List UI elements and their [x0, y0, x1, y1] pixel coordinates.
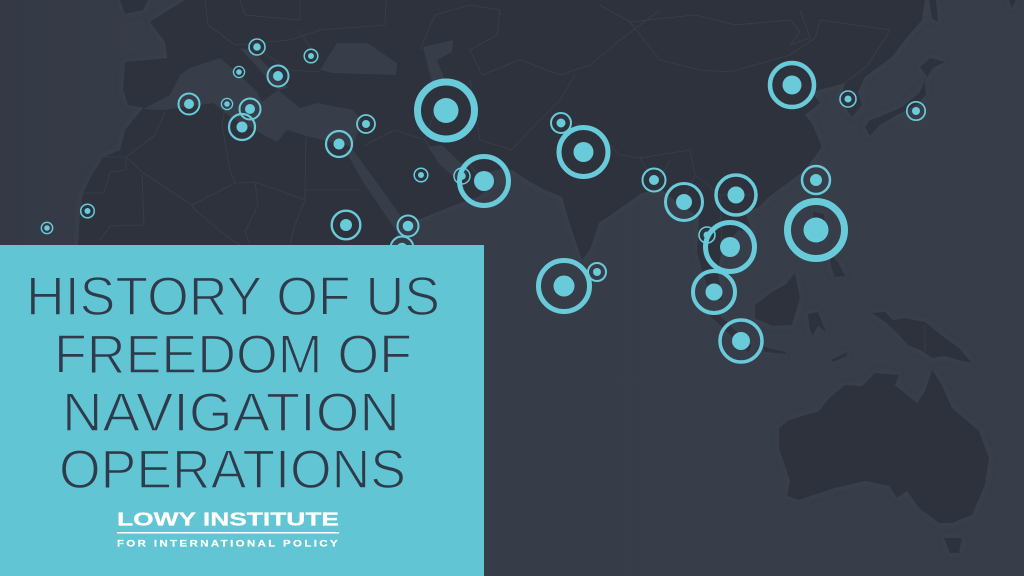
land: lesser Sunda islands: [830, 352, 848, 362]
land: Tasmania: [944, 538, 962, 553]
marker: Eastern Mediterranean: [357, 115, 375, 133]
inland and enclosed seas: [143, 40, 752, 255]
panel background: [0, 245, 484, 576]
title panel: [0, 245, 484, 576]
land: Great Britain: [120, 0, 148, 14]
sea: Mediterranean: [143, 58, 361, 147]
marker: Sri Lanka: [588, 263, 606, 281]
marker: Korea: [840, 91, 856, 107]
sea: Black Sea: [320, 43, 397, 75]
marker: Sudan: [332, 211, 360, 239]
marker: West Africa: [81, 204, 94, 218]
land: Sumatra: [706, 312, 752, 352]
title: [26, 265, 440, 500]
land: Borneo: [755, 273, 800, 326]
land: Mindanao: [829, 253, 845, 277]
marker: Atlantic West Africa: [41, 222, 53, 234]
marker: Gulf of Oman small: [454, 168, 470, 184]
marker: Andaman small: [699, 227, 715, 243]
marker: Java Sea: [720, 320, 762, 362]
land: Java: [762, 346, 786, 354]
land: Japan: [865, 58, 945, 136]
marker: Tyrrhenian north: [233, 66, 245, 78]
land: Eurasia and Africa: [78, 0, 925, 300]
logo: Lowy Institute: [117, 510, 340, 548]
marker: Indian Ocean large: [538, 260, 590, 312]
marker: Yellow Sea: [770, 63, 814, 107]
marker: South China Sea north: [802, 166, 830, 194]
marker: India large: [559, 128, 608, 176]
marker: Adriatic north: [249, 39, 265, 55]
marker: Black Sea west: [304, 49, 318, 63]
marker: Western Mediterranean: [178, 94, 200, 114]
land: Kamchatka fragment: [1009, 0, 1016, 8]
marker: South China Sea large: [788, 202, 844, 258]
sea: Persian Gulf: [428, 145, 470, 178]
event markers: rings with dots: [41, 39, 925, 362]
marker: Myanmar: [666, 184, 702, 220]
marker: Tunisia small: [221, 98, 233, 110]
marker: Bay of Bengal: [642, 168, 666, 192]
land: Australia: [779, 370, 989, 523]
land: Sulawesi: [808, 312, 826, 336]
marker: Gulf of Sidra: [229, 114, 255, 140]
title: OPERATIONS: [59, 438, 406, 500]
land: New Guinea: [872, 312, 972, 363]
marker: Gulf of Aden: [398, 216, 418, 236]
marker: Persian Gulf large: [418, 82, 474, 139]
sea: Caspian: [423, 40, 453, 85]
logo: Lowy Institute: LOWY INSTITUTE: [117, 510, 339, 530]
title: HISTORY OF US: [26, 265, 440, 327]
marker: Egypt: [326, 131, 352, 157]
marker: Horn of Africa: [390, 236, 414, 260]
land: Sakhalin: [929, 0, 938, 22]
marker: Central Mediterranean: [240, 98, 260, 120]
logo: Lowy Institute: FOR INTERNATIONAL POLICY: [117, 538, 340, 548]
title: FREEDOM OF: [54, 323, 412, 385]
marker: Pakistan: [551, 113, 571, 133]
marker: Malacca Strait: [693, 271, 735, 313]
title: NAVIGATION: [62, 381, 400, 443]
marker: Arabian Sea west large: [460, 156, 508, 206]
sea: Adriatic: [240, 48, 288, 90]
land: Luzon: [813, 212, 826, 244]
marker: Gulf of Thailand large: [706, 222, 754, 272]
country borders: [83, 0, 925, 352]
sea: Red Sea: [345, 150, 405, 232]
marker: Arabia small: [414, 168, 428, 182]
sea: Gulf of Thailand: [722, 230, 752, 255]
marker: Japan: [907, 102, 925, 120]
sea: Gulf of Oman: [478, 168, 512, 190]
marker: Gulf of Tonkin: [716, 175, 756, 215]
marker: Adriatic south: [268, 66, 288, 86]
